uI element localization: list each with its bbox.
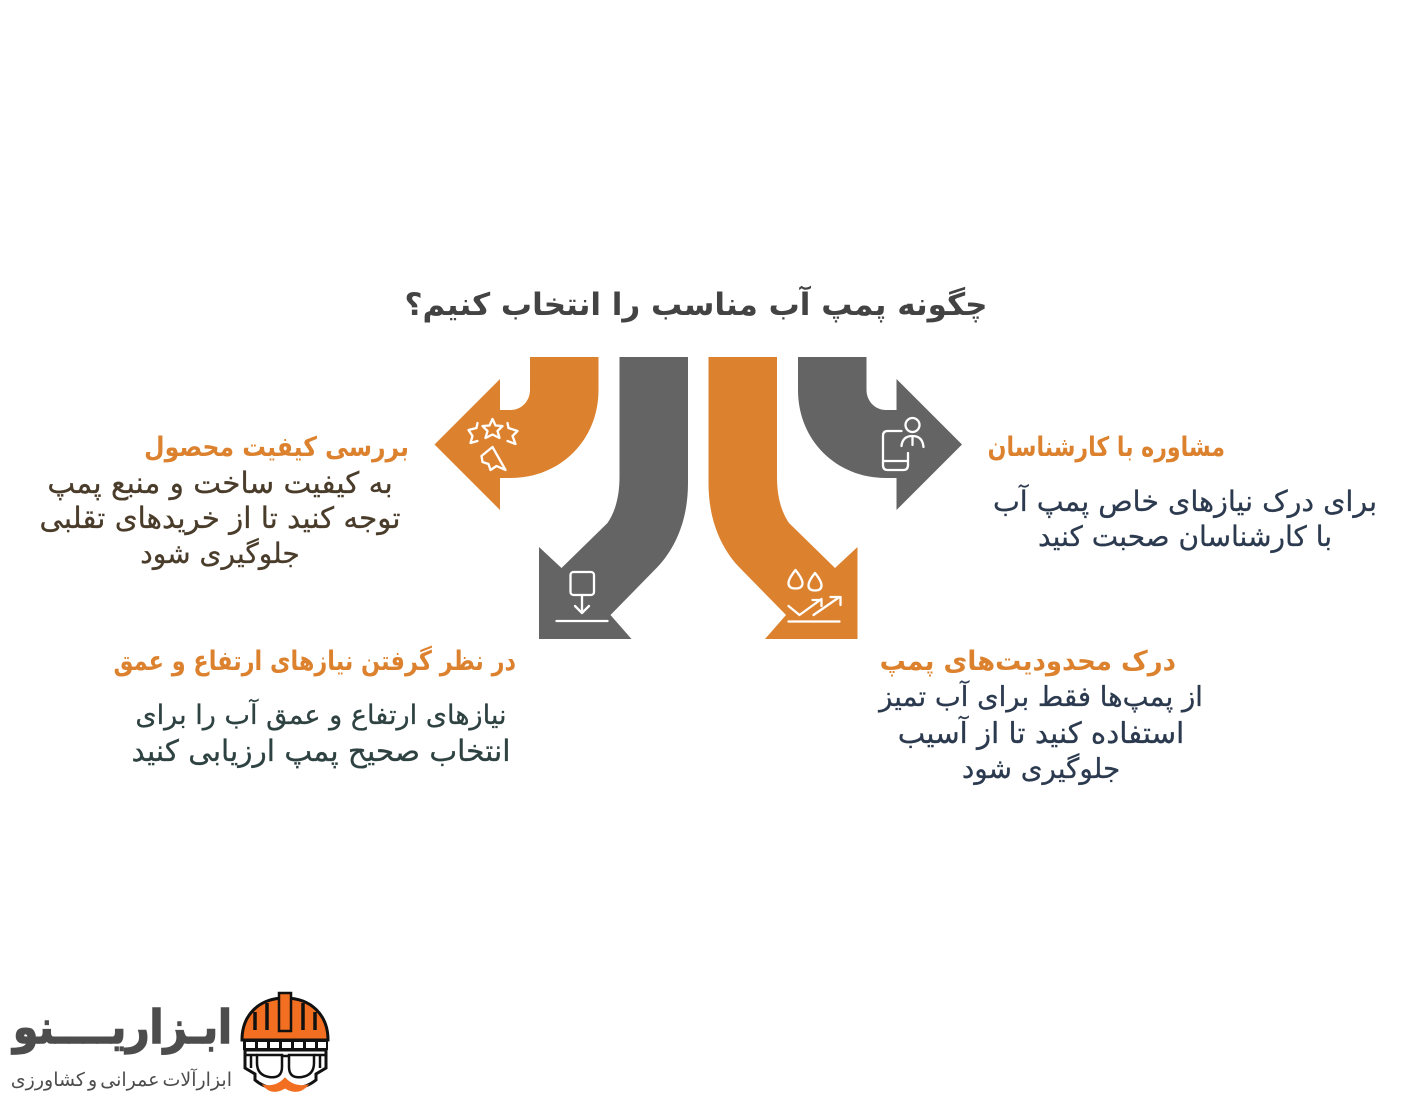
- logo: tagline: ابزارآلات عمرانی و کشاورزی: [11, 1069, 232, 1091]
- arrow: gray down-left: [539, 357, 688, 639]
- icon: square with arrow down to line: [556, 572, 608, 621]
- icon: stars and hand: [468, 419, 518, 470]
- logo: brand name: ابـزاریــــنو: [13, 1000, 232, 1054]
- text block: height and depth needs: [132, 698, 510, 768]
- arrow: gray right: [798, 357, 962, 510]
- arrow: orange left: [434, 357, 598, 510]
- arrow: orange down-right: [708, 357, 858, 639]
- text block: expert consultation: برای درک نیازهای خاص پمپ آب: [993, 485, 1377, 518]
- text block: pump limitations: [878, 680, 1203, 786]
- logo: helmet mascot: [242, 993, 328, 1091]
- heading: expert consultation: مشاوره با کارشناسان: [988, 432, 1225, 463]
- heading: height and depth needs: در نظر گرفتن نیازهای ارتفاع و عمق: [113, 646, 516, 677]
- text block: height and depth needs: انتخاب صحیح پمپ ارزیابی کنید: [132, 734, 510, 768]
- text block: pump limitations: جلوگیری شود: [962, 752, 1120, 785]
- heading: pump limitations: درک محدودیت‌های پمپ: [880, 646, 1176, 677]
- text block: height and depth needs: نیازهای ارتفاع و عمق آب را برای: [135, 700, 507, 731]
- heading: product quality: بررسی کیفیت محصول: [144, 432, 409, 463]
- text block: pump limitations: استفاده کنید تا از آسیب: [898, 716, 1184, 750]
- text block: product quality: [39, 466, 401, 570]
- text block: product quality: توجه کنید تا از خریدهای تقلبی: [39, 501, 401, 535]
- text block: pump limitations: از پمپ‌ها فقط برای آب تمیز: [879, 681, 1203, 713]
- title: چگونه پمپ آب مناسب را انتخاب کنیم؟: [405, 287, 987, 323]
- icon: water drops and rising arrows: [788, 570, 840, 622]
- text block: expert consultation: با کارشناسان صحبت کنید: [1038, 520, 1332, 553]
- text block: product quality: به کیفیت ساخت و منبع پمپ: [47, 466, 393, 500]
- icon: phone and person: [883, 418, 924, 470]
- text block: product quality: جلوگیری شود: [140, 537, 300, 570]
- text block: expert consultation: [993, 484, 1377, 554]
